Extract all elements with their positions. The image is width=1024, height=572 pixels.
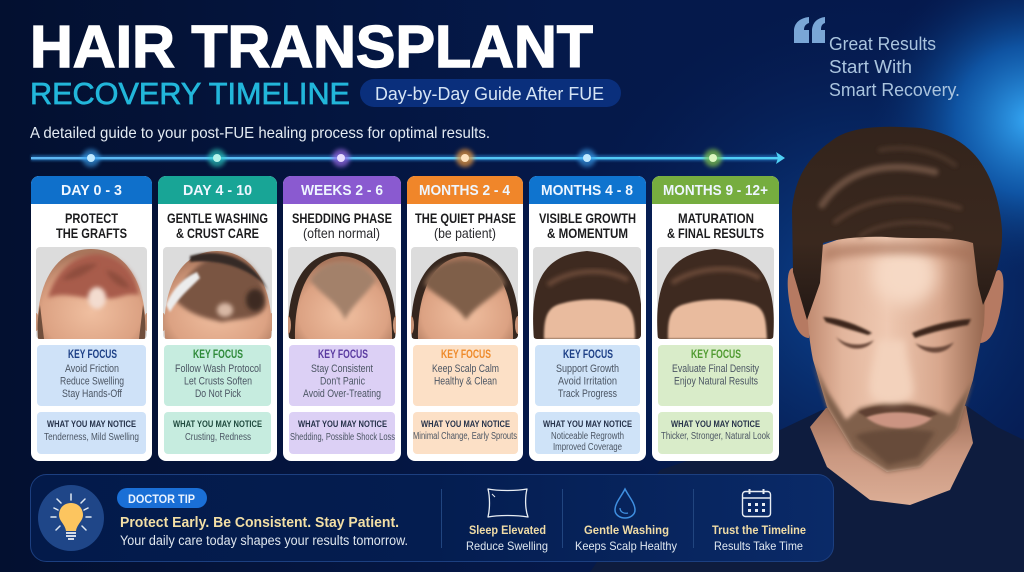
panel: months 4-8: MONTHS 4 - 8 — [541, 182, 633, 199]
panel: months 2-4: Minimal Change, Early Sprouts — [413, 431, 517, 442]
beard — [813, 362, 973, 472]
panel: day 4-10: Crusting, Redness — [185, 432, 251, 443]
neck — [810, 406, 973, 505]
panel: weeks 2-6: SHEDDING PHASE — [292, 210, 392, 226]
icon: light bulb — [38, 485, 104, 551]
key focus — [535, 345, 640, 406]
panel: day 4-10: Follow Wash Protocol — [175, 363, 261, 375]
subtitle: RECOVERY TIMELINE — [30, 76, 350, 111]
photo: fresh grafts — [33, 247, 150, 339]
trust the timeline: Results Take Time — [714, 539, 803, 553]
photo: final results — [657, 247, 774, 339]
panel: months 2-4 — [407, 176, 523, 461]
hair highlights — [822, 148, 960, 236]
mouth — [866, 412, 932, 428]
panel: months 2-4: MONTHS 2 - 4 — [419, 182, 511, 199]
what you may notice — [37, 412, 146, 454]
panel: months 4-8: Improved Coverage — [553, 442, 622, 453]
forehead highlight — [873, 245, 937, 305]
quote — [794, 17, 960, 100]
panel: months 4-8: Noticeable Regrowth — [551, 431, 624, 442]
panel: months 2-4: Keep Scalp Calm — [432, 363, 499, 375]
key focus — [289, 345, 395, 406]
panel: months 9-12+: Thicker, Stronger, Natural Look — [661, 431, 771, 442]
what you may notice — [289, 412, 395, 454]
trust the timeline: Trust the Timeline — [712, 523, 806, 537]
panel: weeks 2-6: WHAT YOU MAY NOTICE — [298, 419, 387, 430]
trust the timeline — [712, 523, 806, 553]
tip text: Protect Early. Be Consistent. Stay Patient. — [120, 515, 399, 531]
panel: months 2-4: WHAT YOU MAY NOTICE — [421, 419, 510, 430]
panel: weeks 2-6 — [283, 176, 401, 461]
panel: day 0-3 — [31, 176, 152, 461]
key focus — [413, 345, 518, 406]
panel: months 4-8: KEY FOCUS — [563, 349, 613, 361]
panel: months 9-12+: Enjoy Natural Results — [674, 376, 758, 388]
key focus — [658, 345, 773, 406]
doctor tip pill — [117, 488, 207, 508]
face — [807, 225, 985, 472]
portrait of man — [590, 127, 1024, 572]
panel: day 4-10: GENTLE WASHING — [167, 210, 268, 226]
sleep elevated: Sleep Elevated — [469, 523, 546, 537]
panel: months 9-12+ — [652, 176, 779, 461]
panel: months 4-8: WHAT YOU MAY NOTICE — [543, 419, 632, 430]
key focus — [37, 345, 146, 406]
what you may notice — [535, 412, 640, 454]
tip text: Your daily care today shapes your results tomorrow. — [120, 533, 408, 548]
panel: day 4-10: DAY 4 - 10 — [183, 182, 252, 199]
quote: Smart Recovery. — [829, 80, 960, 100]
right ear — [980, 270, 1004, 343]
timeline — [31, 149, 785, 167]
panel: day 0-3: WHAT YOU MAY NOTICE — [47, 419, 136, 430]
panel: months 4-8: Support Growth — [556, 363, 619, 375]
chin beard shadow — [855, 429, 935, 465]
tip text — [120, 515, 408, 548]
what you may notice — [164, 412, 271, 454]
key focus — [164, 345, 271, 406]
panel: months 4-8 — [529, 176, 646, 461]
hair — [792, 127, 1002, 320]
panel: weeks 2-6: KEY FOCUS — [318, 349, 368, 361]
sleep elevated: Reduce Swelling — [466, 539, 548, 553]
guide pill: Day-by-Day Guide After FUE — [375, 84, 604, 104]
panel: months 9-12+: MATURATION — [678, 210, 754, 226]
panel: day 4-10: Do Not Pick — [195, 388, 241, 400]
panel: months 2-4: THE QUIET PHASE — [415, 210, 516, 226]
panel: months 4-8: Avoid Irritation — [558, 376, 617, 388]
eyes — [836, 337, 874, 349]
panel: weeks 2-6: Stay Consistent — [311, 363, 373, 375]
panel: doctor tip — [30, 474, 834, 562]
panel: day 0-3: Reduce Swelling — [60, 376, 124, 388]
panel: months 9-12+: KEY FOCUS — [691, 349, 741, 361]
panel: day 0-3: Avoid Friction — [65, 363, 119, 375]
panel: weeks 2-6: Shedding, Possible Shock Loss — [290, 432, 395, 443]
panel: day 4-10: WHAT YOU MAY NOTICE — [173, 419, 262, 430]
quote: Start With — [829, 57, 912, 77]
gentle washing: Keeps Scalp Healthy — [575, 539, 677, 553]
panel: day 4-10: Let Crusts Soften — [184, 376, 252, 388]
panel: months 4-8: Track Progress — [558, 388, 617, 400]
hairline shadow — [822, 242, 974, 262]
photo: visible growth — [533, 247, 642, 339]
panel: weeks 2-6: Don't Panic — [320, 376, 365, 388]
panel: months 9-12+: Evaluate Final Density — [672, 363, 759, 375]
panel: months 4-8: & MOMENTUM — [547, 225, 628, 241]
what you may notice — [658, 412, 773, 454]
panel: months 4-8: VISIBLE GROWTH — [539, 210, 636, 226]
panel: day 0-3: DAY 0 - 3 — [61, 182, 122, 199]
panel: weeks 2-6: WEEKS 2 - 6 — [301, 182, 383, 199]
gentle washing: Gentle Washing — [584, 523, 669, 537]
panel: day 4-10: KEY FOCUS — [193, 349, 243, 361]
icon: calendar — [742, 489, 770, 516]
icon: water drop — [615, 489, 635, 518]
panel: months 2-4: KEY FOCUS — [441, 349, 491, 361]
panel: weeks 2-6: (often normal) — [303, 225, 380, 241]
photo: shedding — [285, 247, 399, 339]
panel: day 0-3: Stay Hands-Off — [62, 388, 123, 400]
panel: day 0-3: Tenderness, Mild Swelling — [44, 432, 139, 443]
what you may notice — [413, 412, 518, 454]
nose — [870, 340, 913, 403]
panel: months 2-4: Healthy & Clean — [434, 376, 497, 388]
eyebrows — [823, 317, 872, 335]
doctor tip pill: DOCTOR TIP — [128, 492, 195, 506]
panel: months 2-4: (be patient) — [434, 225, 496, 241]
panel: months 9-12+: & FINAL RESULTS — [667, 225, 764, 241]
panel: day 4-10: & CRUST CARE — [176, 225, 259, 241]
description: A detailed guide to your post-FUE healing process for optimal results. — [30, 125, 490, 142]
quote: Great Results — [829, 34, 936, 54]
panel: day 0-3: KEY FOCUS — [68, 349, 117, 361]
gentle washing — [575, 523, 677, 553]
guide pill — [360, 79, 621, 107]
photo: quiet phase — [408, 247, 521, 339]
panel: day 0-3: PROTECT — [65, 210, 118, 226]
panel: months 9-12+: WHAT YOU MAY NOTICE — [671, 419, 760, 430]
title: HAIR TRANSPLANT — [30, 14, 593, 80]
panel: day 0-3: THE GRAFTS — [56, 225, 127, 241]
icon: pillow — [488, 489, 528, 517]
panel: day 4-10 — [158, 176, 277, 461]
photo: crusting scalp — [160, 247, 275, 339]
t-shirt — [590, 406, 1024, 572]
sleep elevated — [466, 523, 548, 553]
panel: months 9-12+: MONTHS 9 - 12+ — [663, 182, 768, 199]
left ear — [788, 268, 812, 338]
panel: weeks 2-6: Avoid Over-Treating — [303, 388, 381, 400]
